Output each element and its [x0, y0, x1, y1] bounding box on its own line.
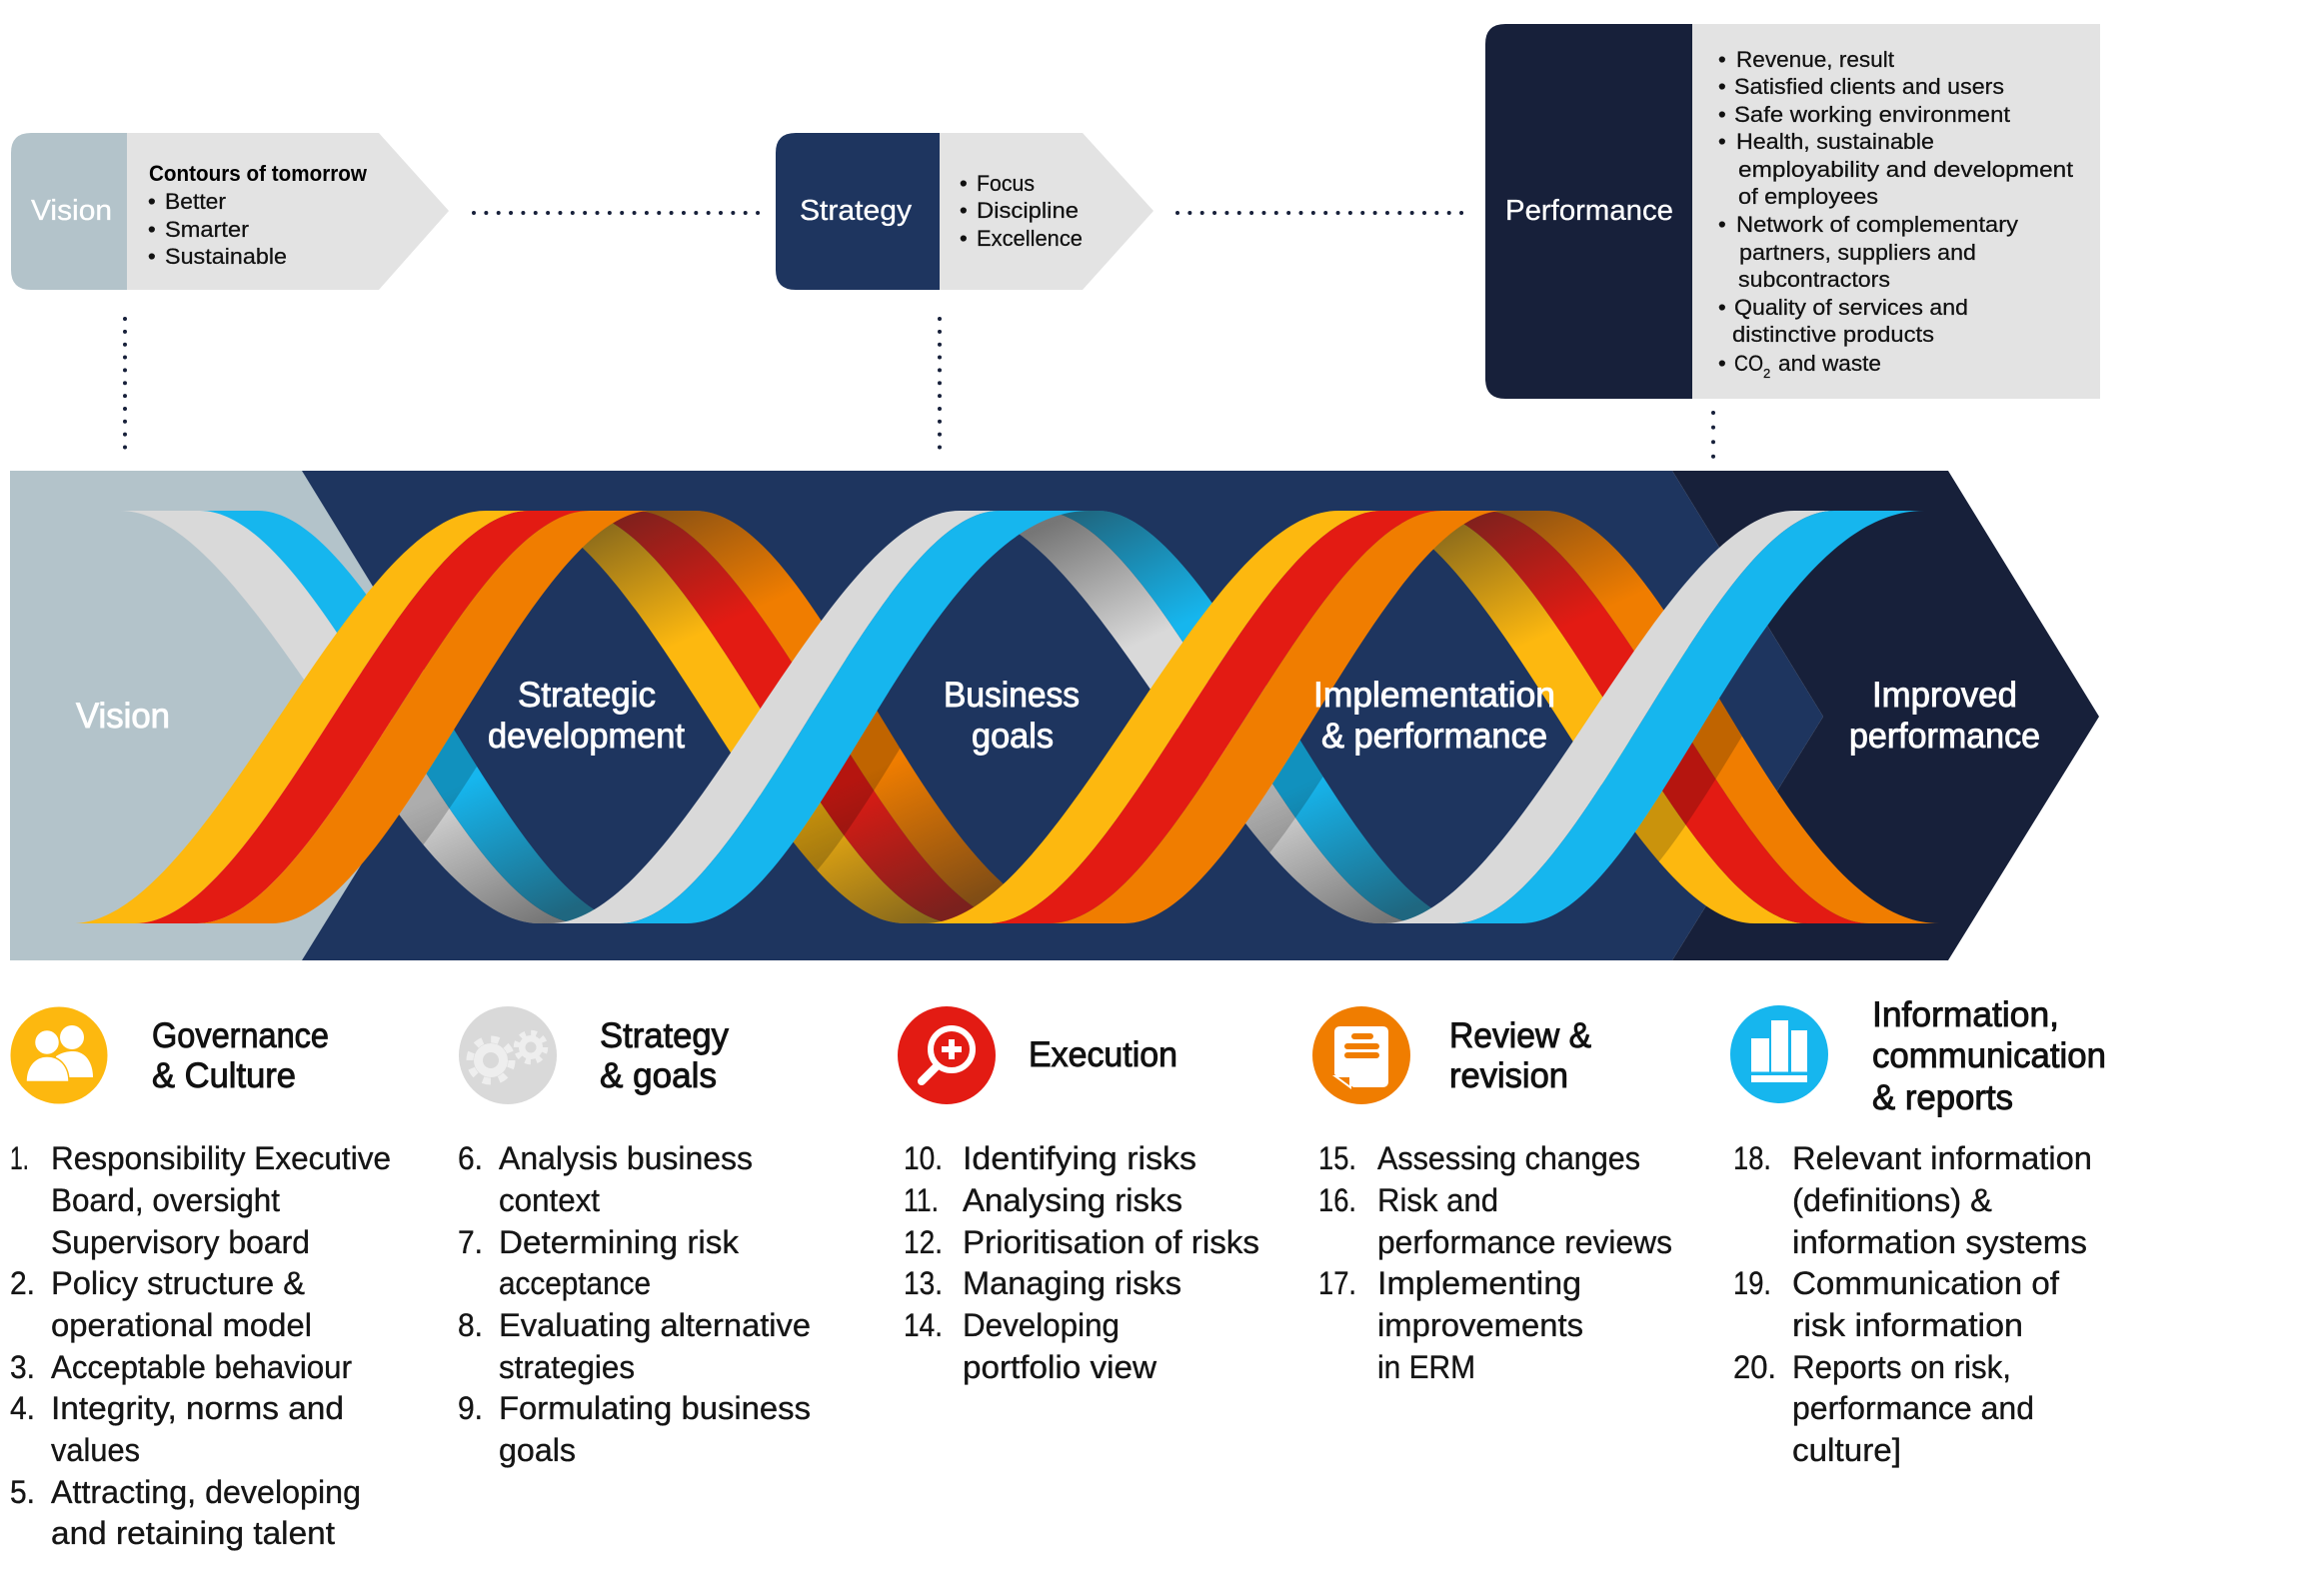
- front ribbon: yellow red orange first rise: [72, 511, 652, 923]
- back ribbon: yellow red orange second descent: [1360, 511, 1970, 923]
- icon: gears: [459, 1006, 557, 1104]
- list: items 6 to 9: acceptance: [499, 1265, 651, 1301]
- band section: improved performance arrow: [1672, 471, 2099, 960]
- helix process band: [10, 471, 2099, 960]
- list: items 1 to 5: Board, oversight: [51, 1182, 280, 1218]
- performance list background: [1692, 24, 2100, 399]
- list: items 1 to 5: Acceptable behaviour: [51, 1349, 352, 1385]
- horizontal dotted connector: vision to strategy: [474, 211, 760, 215]
- list: items 15 to 17: Assessing changes: [1377, 1140, 1640, 1176]
- heading: information, communication and reports: [1872, 995, 2106, 1117]
- list: items 1 to 5: Integrity, norms and: [51, 1390, 344, 1426]
- icon: people: [10, 1007, 108, 1103]
- list: items 1 to 5: Policy structure &: [51, 1265, 305, 1301]
- list: items 6 to 9: strategies: [499, 1349, 635, 1385]
- performance list: Quality of services and: [1734, 295, 1968, 320]
- band section: navy middle arrow: [290, 471, 1823, 960]
- performance label: Performance: [1505, 195, 1673, 227]
- list: items 15 to 17: Implementing: [1377, 1265, 1581, 1301]
- icon: bar chart: [1730, 1005, 1828, 1103]
- list: items 18 to 20: information systems: [1792, 1224, 2087, 1260]
- band label: vision: Vision: [76, 697, 170, 736]
- heading: governance and culture: Governance: [152, 1016, 329, 1055]
- list: items 1 to 5: [10, 1140, 391, 1551]
- performance list: •: [1718, 129, 1726, 154]
- strategy list: Focus: [977, 171, 1035, 196]
- vertical dotted connector: strategy: [938, 319, 942, 450]
- panel: review and revision: [1312, 1006, 1672, 1385]
- performance list: subcontractors: [1738, 267, 1890, 292]
- vision list: Sustainable: [165, 244, 287, 269]
- list: items 1 to 5: values: [51, 1432, 140, 1468]
- heading: execution: Execution: [1029, 1035, 1177, 1074]
- icon: document: [1312, 1006, 1410, 1104]
- heading: review and revision: Review &: [1449, 1016, 1591, 1055]
- vision list: [148, 161, 368, 269]
- list: items 18 to 20: 19.: [1733, 1265, 1771, 1301]
- icon: magnifier: [898, 1006, 996, 1104]
- performance list: Safe working environment: [1734, 102, 2010, 127]
- list: items 18 to 20: (definitions) &: [1792, 1182, 1992, 1218]
- list: items 15 to 17: [1318, 1140, 1672, 1385]
- band label: strategic development: Strategic: [518, 676, 656, 715]
- performance list: Satisfied clients and users: [1734, 74, 2004, 99]
- list: items 18 to 20: culture]: [1792, 1432, 1901, 1468]
- panel: performance box: [1485, 24, 2100, 399]
- strategy list: •: [960, 226, 968, 251]
- strategy label tab: [776, 133, 940, 290]
- list: items 10 to 14: Identifying risks: [963, 1140, 1196, 1176]
- panel: information, communication and reports: [1730, 995, 2106, 1468]
- strategy list: [960, 171, 1083, 251]
- band label: strategic development: [488, 676, 685, 756]
- performance list: distinctive products: [1732, 322, 1934, 347]
- performance list: •: [1718, 47, 1726, 72]
- list: items 1 to 5: 2.: [10, 1265, 35, 1301]
- list: items 6 to 9: Determining risk: [499, 1224, 740, 1260]
- list: items 6 to 9: Evaluating alternative: [499, 1307, 811, 1343]
- list: items 10 to 14: Prioritisation of risks: [963, 1224, 1259, 1260]
- list: items 6 to 9: goals: [499, 1432, 576, 1468]
- vision arrow body: [127, 133, 449, 290]
- panel: strategy and goals: [458, 1006, 811, 1468]
- heading: review and revision: revision: [1449, 1056, 1568, 1095]
- list: items 10 to 14: 11.: [904, 1182, 939, 1218]
- band label: strategic development: development: [488, 717, 685, 756]
- band label: improved performance: performance: [1849, 717, 2040, 756]
- performance label tab: [1485, 24, 1692, 399]
- list: items 10 to 14: [904, 1140, 1259, 1385]
- band label: business goals: goals: [972, 717, 1054, 756]
- front ribbon: yellow red orange second rise: [925, 511, 1504, 923]
- list: items 6 to 9: context: [499, 1182, 600, 1218]
- strategy arrow body: [940, 133, 1154, 290]
- performance list: CO: [1734, 351, 1763, 376]
- list: items 1 to 5: 3.: [10, 1349, 35, 1385]
- vision label tab: [11, 133, 127, 290]
- band label: implementation and performance: Implementation: [1313, 676, 1555, 715]
- list: items 18 to 20: 20.: [1733, 1349, 1776, 1385]
- vision label: Vision: [31, 195, 112, 227]
- vertical dotted connector: performance: [1711, 413, 1715, 459]
- list: items 1 to 5: Responsibility Executive: [51, 1140, 391, 1176]
- list: items 6 to 9: Formulating business: [499, 1390, 811, 1426]
- band section: vision light: [10, 471, 453, 960]
- strategy list: •: [960, 171, 968, 196]
- band label: improved performance: [1849, 676, 2040, 756]
- strategy list: Discipline: [977, 198, 1079, 223]
- front ribbon: white and blue first rise: [550, 511, 1090, 923]
- performance list: Health, sustainable: [1736, 129, 1934, 154]
- performance list: •: [1718, 102, 1726, 127]
- performance list: •: [1718, 212, 1726, 237]
- band label: improved performance: Improved: [1872, 676, 2017, 715]
- list: items 15 to 17: Risk and: [1377, 1182, 1498, 1218]
- performance list: employability and development: [1738, 157, 2073, 182]
- list: items 10 to 14: Managing risks: [963, 1265, 1181, 1301]
- panel: vision box: [11, 133, 449, 290]
- list: items 18 to 20: Reports on risk,: [1792, 1349, 2011, 1385]
- list: items 18 to 20: Communication of: [1792, 1265, 2059, 1301]
- back ribbon: yellow red orange first descent: [520, 511, 1068, 923]
- strategy list: Excellence: [977, 226, 1083, 251]
- panel: execution: [898, 1006, 1259, 1385]
- list: items 15 to 17: improvements: [1377, 1307, 1583, 1343]
- band label: implementation and performance: & performance: [1321, 717, 1547, 756]
- performance list: partners, suppliers and: [1739, 240, 1976, 265]
- list: items 1 to 5: and retaining talent: [51, 1515, 335, 1551]
- list: items 6 to 9: Analysis business: [499, 1140, 753, 1176]
- list: items 18 to 20: performance and: [1792, 1390, 2034, 1426]
- list: items 10 to 14: Developing: [963, 1307, 1120, 1343]
- panel: strategy box: [776, 133, 1154, 290]
- back ribbon: white and blue first descent: [124, 511, 626, 923]
- list: items 18 to 20: 18.: [1733, 1140, 1771, 1176]
- performance list: •: [1718, 351, 1726, 376]
- list: items 15 to 17: 16.: [1318, 1182, 1356, 1218]
- list: items 15 to 17: 15.: [1318, 1140, 1356, 1176]
- list: items 10 to 14: 13.: [904, 1265, 943, 1301]
- vision list: Contours of tomorrow: [149, 161, 368, 186]
- list: items 10 to 14: portfolio view: [963, 1349, 1157, 1385]
- band label: business goals: [944, 676, 1080, 756]
- list: items 18 to 20: Relevant information: [1792, 1140, 2092, 1176]
- list: items 15 to 17: performance reviews: [1377, 1224, 1672, 1260]
- list: items 6 to 9: 8.: [458, 1307, 483, 1343]
- performance list: •: [1718, 295, 1726, 320]
- list: items 6 to 9: 6.: [458, 1140, 483, 1176]
- vision list: Smarter: [165, 217, 249, 242]
- vision list: Better: [165, 189, 226, 214]
- back ribbon: white and blue second descent: [982, 511, 1464, 923]
- list: items 15 to 17: 17.: [1318, 1265, 1356, 1301]
- list: items 1 to 5: 4.: [10, 1390, 35, 1426]
- performance list: and waste: [1778, 351, 1881, 376]
- heading: review and revision: [1449, 1016, 1591, 1095]
- list: items 1 to 5: operational model: [51, 1307, 312, 1343]
- heading: strategy and goals: Strategy: [600, 1016, 729, 1055]
- performance list: 2: [1763, 366, 1770, 381]
- vision list: •: [148, 189, 156, 214]
- list: items 10 to 14: 12.: [904, 1224, 943, 1260]
- vision list: •: [148, 217, 156, 242]
- performance list: Network of complementary: [1736, 212, 2018, 237]
- performance list: [1718, 47, 2073, 381]
- band label: implementation and performance: [1313, 676, 1555, 756]
- list: items 6 to 9: 7.: [458, 1224, 483, 1260]
- heading: strategy and goals: & goals: [600, 1056, 717, 1095]
- list: items 10 to 14: 10.: [904, 1140, 943, 1176]
- horizontal dotted connector: strategy to performance: [1177, 211, 1463, 215]
- heading: information, communication and reports: Information,: [1872, 995, 2059, 1034]
- list: items 18 to 20: risk information: [1792, 1307, 2023, 1343]
- vision list: •: [148, 244, 156, 269]
- list: items 1 to 5: 5.: [10, 1474, 35, 1510]
- front ribbon: white and blue second rise: [1384, 511, 1924, 923]
- list: items 6 to 9: 9.: [458, 1390, 483, 1426]
- band label: business goals: Business: [944, 676, 1080, 715]
- performance list: Revenue, result: [1736, 47, 1894, 72]
- list: items 18 to 20: [1733, 1140, 2092, 1468]
- list: items 10 to 14: 14.: [904, 1307, 943, 1343]
- list: items 10 to 14: Analysing risks: [963, 1182, 1182, 1218]
- performance list: of employees: [1738, 184, 1878, 209]
- heading: governance and culture: [152, 1016, 329, 1095]
- list: items 1 to 5: 1.: [10, 1140, 29, 1176]
- list: items 1 to 5: Attracting, developing: [51, 1474, 361, 1510]
- vertical dotted connector: vision: [123, 319, 127, 450]
- heading: governance and culture: & Culture: [152, 1056, 296, 1095]
- strategy list: •: [960, 198, 968, 223]
- performance list: •: [1718, 74, 1726, 99]
- heading: information, communication and reports: & reports: [1872, 1078, 2013, 1117]
- list: items 6 to 9: [458, 1140, 811, 1468]
- strategy label: Strategy: [800, 195, 913, 227]
- heading: strategy and goals: [600, 1016, 729, 1095]
- panel: governance and culture: [10, 1007, 391, 1551]
- list: items 15 to 17: in ERM: [1377, 1349, 1475, 1385]
- list: items 1 to 5: Supervisory board: [51, 1224, 310, 1260]
- heading: information, communication and reports: communication: [1872, 1036, 2106, 1075]
